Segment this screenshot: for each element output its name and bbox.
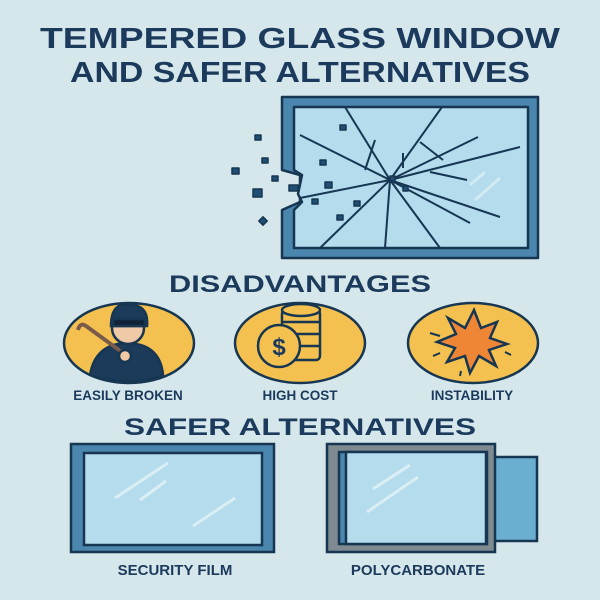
icon: instability (explosion) — [408, 303, 538, 383]
icon: high cost (coins): $ — [272, 334, 286, 361]
label: polycarbonate: POLYCARBONATE — [351, 562, 485, 579]
label: instability: INSTABILITY — [431, 388, 513, 403]
label: easily broken: EASILY BROKEN — [73, 388, 183, 403]
icon: high cost (coins) — [235, 303, 365, 383]
broken window illustration — [232, 97, 538, 258]
window: security film — [71, 444, 274, 552]
heading: disadvantages: DISADVANTAGES — [169, 271, 431, 298]
label: high cost: HIGH COST — [262, 388, 338, 403]
icon: easily broken (burglar) — [64, 303, 194, 383]
label: security film: SECURITY FILM — [118, 562, 232, 579]
title: TEMPERED GLASS WINDOW — [40, 23, 561, 55]
heading: safer alternatives: SAFER ALTERNATIVES — [124, 414, 476, 441]
window: polycarbonate — [327, 444, 537, 552]
title: AND SAFER ALTERNATIVES — [70, 57, 530, 89]
title — [40, 23, 561, 89]
